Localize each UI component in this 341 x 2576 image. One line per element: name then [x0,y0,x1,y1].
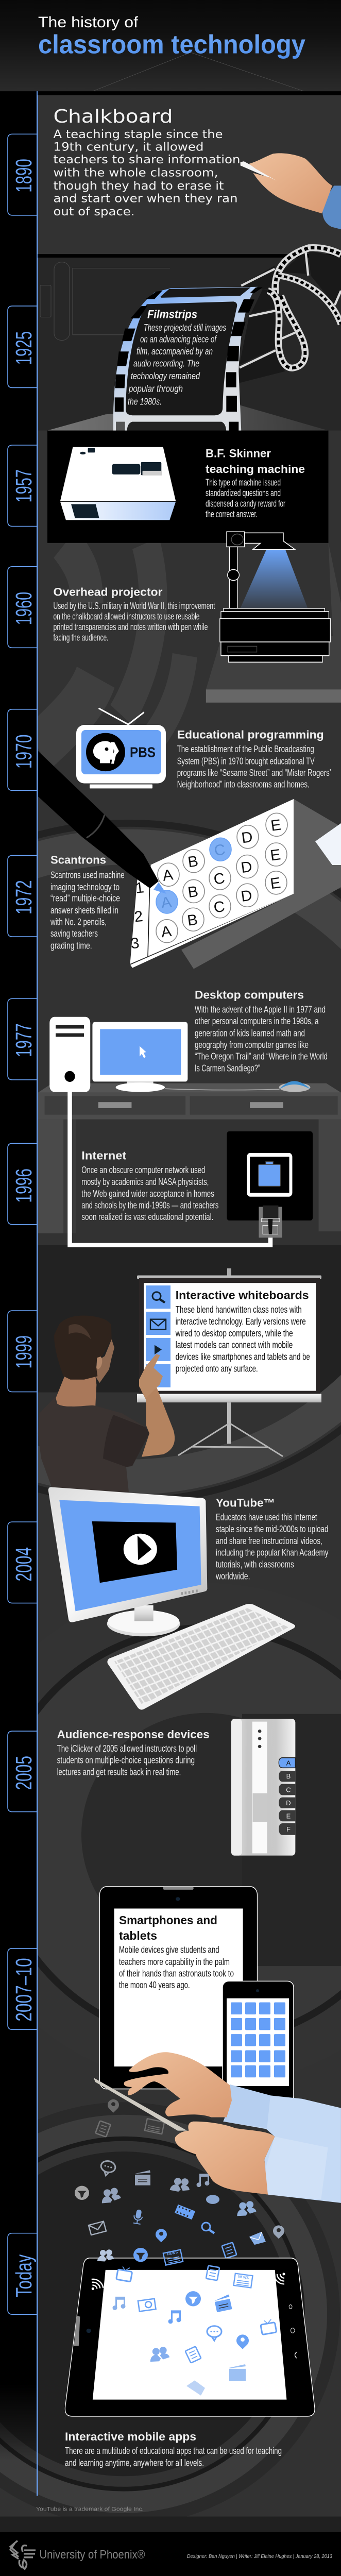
text: scantrons: “read” multiple-choice [50,893,120,903]
text: chalkboard description: A teaching staple since the [54,128,223,141]
text: overhead projector: Used by the U.S. military in World War II, this improvement [54,600,215,611]
text: audience-response devices: lectures and get results back in real time. [57,1767,181,1777]
text: teaching machine: dispensed a candy reward for [206,498,285,509]
text: interactive whiteboards [175,1304,310,1374]
text: overhead projector: facing the audience. [54,632,109,643]
text: audience-response devices: The iClicker of 2005 allowed instructors to poll [57,1743,197,1754]
text: filmstrips: the 1980s. [128,396,162,407]
illustration: clicker: B [286,1772,291,1780]
year labels: 1996 [12,1168,37,1203]
text: interactive whiteboards: wired to desktop computers, while the [175,1328,293,1338]
text: chalkboard description: out of space. [54,205,135,218]
icon column [146,1285,170,1387]
panel: audience-response devices [57,1719,295,1856]
title [38,14,305,59]
text: interactive mobile apps [65,2445,282,2468]
text: scantrons [50,870,124,951]
title: classroom technology [38,29,305,59]
heading: smartphones and tablets: Smartphones and [119,1914,217,1927]
illustration: answer sheet: C [213,841,227,859]
text: educational programming [177,743,331,789]
text: chalkboard description: with the whole classroom, [54,166,218,179]
icon: hand holding chalk [241,153,341,229]
text: smartphones and tablets: teachers more capability in the palm [119,1956,230,1967]
text: internet [81,1164,218,1222]
left timeline column [0,91,38,2496]
text: youtube: worldwide. [215,1571,250,1582]
illustration: cable [70,1092,270,1245]
illustration: clicker: D [286,1799,291,1807]
text: filmstrips: audio recording. The [133,358,199,368]
text: youtube [215,1512,329,1582]
year labels: 1970 [12,735,37,769]
text: audience-response devices [57,1743,197,1777]
text: teaching machine: standardized questions and [206,487,281,498]
illustration: answer sheet: 1 [134,879,145,897]
illustration: answer sheet [130,799,341,969]
panel: internet [70,1092,313,1245]
heading: desktop computers: Desktop computers [195,989,304,1001]
illustration: answer sheet: A [160,923,173,941]
year labels: 1972 [12,880,37,914]
text: interactive mobile apps: and learning anytime, anywhere for all levels. [65,2458,204,2468]
text: youtube: tutorials, with classrooms [216,1559,294,1570]
icon: pencil [38,751,166,894]
year labels: 1977 [12,1023,37,1057]
text: university name: University of Phoenix® [40,2548,145,2562]
heading: chalkboard: Chalkboard [54,106,173,127]
illustration: computer [49,1017,311,1092]
text: scantrons: with No. 2 pencils, [50,917,107,927]
panel: interactive mobile apps text [65,2430,282,2468]
text: internet: the Web gained wider acceptance in homes [81,1188,214,1199]
text: scantrons: answer sheets filled in [50,905,118,916]
text: overhead projector [54,600,215,643]
text: filmstrips: film, accompanied by an [137,346,213,357]
year labels: 1957 [12,469,37,503]
illustration: teaching machine [60,447,176,520]
text: internet: mostly by academics and NASA physicists, [81,1176,209,1187]
text: smartphones and tablets [119,1944,234,1990]
text: chalkboard description: 19th century, it allowed [54,141,204,154]
illustration: answer sheet: 3 [130,935,140,952]
illustration: answer sheet: C [213,898,226,916]
illustration: mobile app tablet [65,2248,315,2416]
heading: teaching machine [206,447,305,476]
text: scantrons: Scantrons used machine [50,870,125,880]
year labels: 1925 [12,331,37,365]
text: overhead projector: printed transparencies and notes written with pen while [54,621,208,632]
illustration: answer sheet: C [213,870,226,888]
year labels: 1890 [12,159,37,193]
illustration: keyboard [107,1604,295,1710]
illustration: mobile app tablet: NEWS [167,2251,178,2257]
text: filmstrips [128,308,226,407]
text: interactive whiteboards: projected onto any surface. [176,1363,258,1374]
text: chalkboard description: though they had to erase it [54,179,224,193]
text: audience-response devices: students on multiple-choice questions during [57,1755,195,1766]
panel: overhead projector table [206,543,341,703]
panel: scantrons [38,751,341,969]
illustration: clicker: F [286,1825,291,1833]
illustration: answer sheet: B [186,853,199,871]
icons: floating apps cloud [75,2099,284,2258]
heading: overhead projector: Overhead projector [54,586,163,599]
year labels: 2004 [12,1547,37,1581]
text: scantrons: grading time. [50,940,92,951]
illustration: clicker: E [286,1812,291,1820]
illustration: answer sheet: D [240,858,253,876]
illustration: tablet [99,1887,257,2089]
illustration: monitor [48,1487,207,1636]
illustration: desk [38,1083,341,1233]
text: scantrons: imaging technology to [50,882,120,892]
text: desktop computers [195,1004,328,1073]
header band [0,0,341,91]
text: scantrons: saving teachers [50,928,98,939]
text: chalkboard description: and start over when they ran [54,192,238,205]
heading: youtube: YouTube™ [216,1497,275,1510]
heading: internet: Internet [81,1149,127,1162]
text: teaching machine: This type of machine issued [206,477,281,487]
text: internet: soon realized its vast educational potential. [81,1211,213,1222]
heading: smartphones and tablets [119,1914,217,1943]
year labels: 1960 [12,592,37,625]
text: overhead projector: on the chalkboard allowed instructors to use reusable [54,611,200,622]
year tabs [8,134,37,2314]
icon: University of Phoenix logo [10,2541,36,2569]
illustration: answer sheet: E [269,874,282,892]
faint projector outline [40,262,170,340]
text: chalkboard description [54,128,241,218]
panel: interactive whiteboards [38,1268,321,1492]
text: smartphones and tablets: the moon 40 years ago. [119,1979,190,1990]
text: smartphones and tablets: of their hands than astronauts took to [119,1968,234,1979]
illustration: smartphone [223,1981,294,2102]
title: The history of [38,14,139,31]
illustration: answer sheet: E [269,817,282,835]
text: internet: Once an obscure computer network used [81,1164,205,1175]
panel: youtube [48,1487,329,1710]
panel: filmstrips [40,248,341,431]
panel: smartphones and tablets [99,1887,294,2102]
text: credits: Designer: Ban Nguyen | Writer: Jill Elaine Hughes | January 28, 2013 [187,2554,332,2560]
heading: smartphones and tablets: tablets [119,1929,157,1943]
heading: educational programming: Educational programming [177,728,324,741]
illustration: answer sheet: A [160,893,173,911]
illustration: mobile app tablet: NEWS [238,2275,249,2280]
text: interactive whiteboards: latest models can connect with mobile [176,1340,293,1350]
panel: overhead projector [54,532,330,662]
illustration: clicker [231,1719,295,1856]
projector light [47,404,328,431]
panel: B.F. Skinner teaching machine [47,431,329,543]
illustration: hands holding tablet [94,2052,341,2203]
text: desktop computers: Is Carmen Sandiego?” [195,1062,260,1073]
illustration: answer sheet: D [241,828,254,846]
illustration: clicker: A [286,1759,291,1767]
text: chalkboard description: teachers to share information [54,153,241,166]
illustration: answer sheet: A [161,867,174,885]
text: internet: and schools by the mid-1990s — and teachers [81,1200,218,1210]
text: smartphones and tablets: Mobile devices give students and [119,1944,219,1955]
illustration: film reel [113,248,341,431]
panel: educational programming [76,708,331,789]
heading: interactive mobile apps: Interactive mobile apps [65,2430,196,2443]
heading: scantrons: Scantrons [50,854,106,867]
panel: desktop computers [38,989,341,1233]
heading: teaching machine: B.F. Skinner [206,447,271,460]
trademark note: YouTube is a trademark of Google Inc. [36,2506,144,2512]
year labels: 2007–10 [12,1958,37,2022]
illustration: clicker: C [286,1786,291,1793]
illustration: projection screen [137,1268,321,1456]
year labels: Today [12,2255,37,2297]
illustration: answer sheet: B [186,883,199,901]
text: filmstrips: technology remained [131,370,200,381]
year labels [12,159,37,2297]
footer [0,2532,341,2576]
illustration: man pointing at screen [38,1316,175,1492]
heading: interactive whiteboards: Interactive whiteboards [176,1289,309,1301]
illustration: answer sheet: E [269,846,282,864]
illustration: answer sheet: D [240,887,253,905]
text: filmstrips: Filmstrips [147,308,197,320]
text: filmstrips: popular through [128,383,183,394]
icon: television with PBS logo: PBS [130,744,156,760]
text: teaching machine [206,477,285,519]
illustration: answer sheet: B [186,911,199,929]
text: filmstrips: These projected still images [144,322,226,333]
year labels: 1999 [12,1335,37,1369]
illustration: answer sheet: 2 [133,908,144,925]
icon: television with PBS logo [76,708,166,788]
illustration: overhead projector [220,532,330,662]
text: filmstrips: on an advancing piece of [140,334,217,344]
illustration: network port and plug [227,1131,313,1238]
text: teaching machine: the correct answer. [206,509,258,519]
year labels: 2005 [12,1756,37,1790]
heading: audience-response devices: Audience-response devices [57,1728,210,1741]
panel: chalkboard [38,91,341,258]
heading: teaching machine: teaching machine [206,463,305,476]
